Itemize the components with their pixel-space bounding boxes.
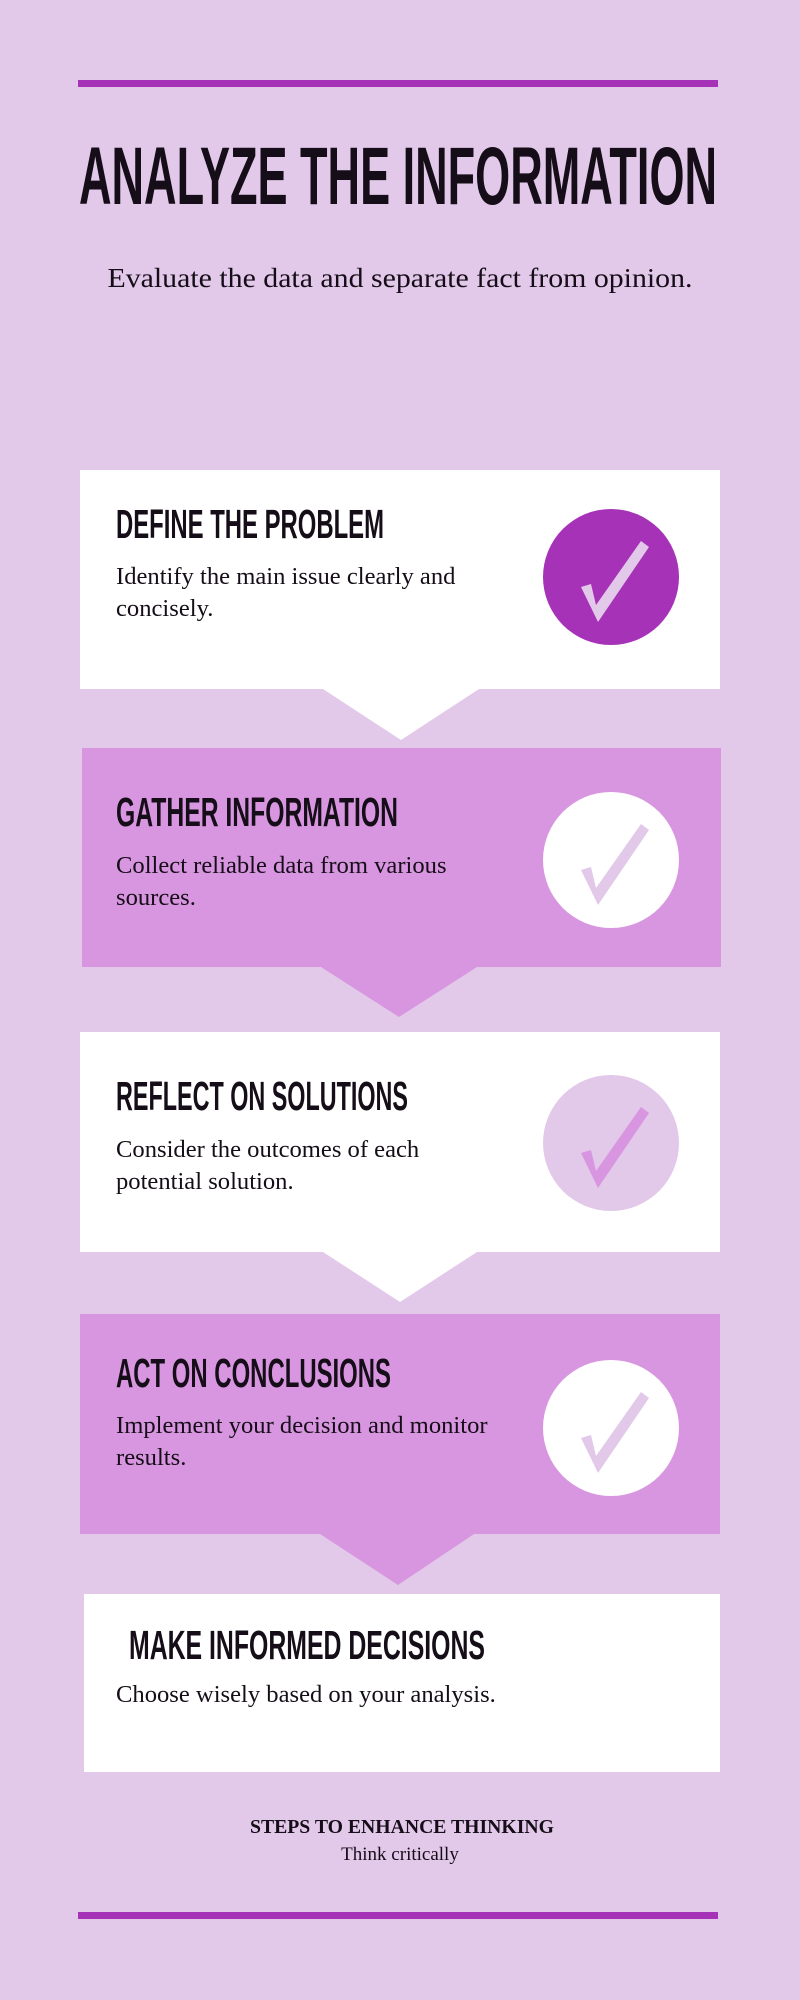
footer: Think critically [341, 1844, 459, 1865]
heading: reflect: REFLECT ON SOLUTIONS [116, 1073, 408, 1119]
icon: check 2 [543, 792, 679, 928]
panel: act on conclusions [80, 1314, 720, 1585]
subtitle: Evaluate the data and separate fact from opinion. [108, 263, 692, 293]
text: gather: Collect reliable data from various [116, 852, 447, 879]
icon: check 1 [543, 509, 679, 645]
heading: define the problem: DEFINE THE PROBLEM [116, 501, 384, 547]
panel: gather information: sources. [116, 884, 196, 911]
panel: define the problem [80, 470, 720, 740]
text: act: Implement your decision and monitor [116, 1412, 488, 1439]
icon: check 3 [543, 1075, 679, 1211]
panel: gather information [82, 748, 721, 1017]
heading: act: ACT ON CONCLUSIONS [116, 1350, 391, 1396]
footer: STEPS TO ENHANCE THINKING [250, 1816, 554, 1838]
text: define: Identify the main issue clearly and [116, 563, 455, 590]
icon: check 4 [543, 1360, 679, 1496]
panel: reflect on solutions: potential solution. [116, 1168, 294, 1195]
footer [250, 1816, 554, 1865]
panel: act on conclusions: results. [116, 1444, 186, 1471]
panel: make informed decisions [84, 1594, 720, 1772]
panel: reflect on solutions [80, 1032, 720, 1302]
panel: define the problem: concisely. [116, 595, 213, 622]
heading: make informed decisions: MAKE INFORMED DECISIONS [129, 1622, 485, 1668]
text: reflect: Consider the outcomes of each [116, 1136, 419, 1163]
heading: gather information: GATHER INFORMATION [116, 789, 398, 835]
text: make: Choose wisely based on your analysis. [116, 1681, 496, 1708]
